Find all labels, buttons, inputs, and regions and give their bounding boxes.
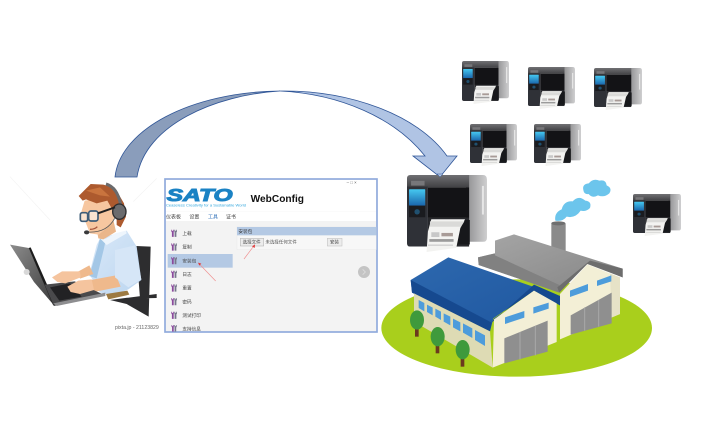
smile — [90, 227, 97, 229]
hair — [79, 184, 126, 227]
smoke clouds — [555, 180, 611, 221]
curved arrow from operator to printers — [115, 91, 457, 177]
window controls: – □ × — [347, 180, 357, 185]
sidebar menu — [171, 230, 201, 333]
back building wall — [560, 264, 620, 339]
SATO logo: SATO — [167, 185, 233, 205]
front door — [504, 321, 548, 363]
microphone — [87, 218, 115, 232]
sidebar menu: 支持信息 — [182, 326, 201, 333]
small printers — [462, 61, 681, 236]
sidebar menu: 复制 — [182, 244, 192, 251]
right forearm — [87, 275, 121, 293]
chimney — [551, 221, 566, 253]
green ground — [381, 279, 652, 377]
tie — [89, 238, 106, 278]
factory illustration — [381, 180, 652, 377]
torso — [89, 231, 141, 295]
side windows — [419, 300, 485, 346]
sidebar menu: 重置 — [182, 285, 192, 292]
top navigation: 仪表板 — [166, 214, 181, 221]
glasses — [80, 207, 115, 221]
back door — [571, 293, 612, 335]
blue roof — [411, 257, 560, 331]
selected sidebar item — [168, 254, 233, 268]
sidebar menu: 安装包 — [182, 257, 197, 264]
top navigation: 设置 — [189, 214, 199, 221]
laptop screen — [10, 245, 54, 305]
top navigation: 工具 — [208, 215, 218, 221]
belt — [106, 291, 129, 299]
chair — [110, 246, 157, 317]
roof lower tier — [478, 253, 559, 293]
front building side wall — [414, 293, 493, 368]
WebConfig window — [165, 179, 377, 333]
laptop base — [45, 281, 105, 306]
front gable windows — [505, 311, 524, 324]
roof gable edge — [557, 261, 623, 293]
headset ear cup — [113, 204, 126, 219]
content panel — [237, 227, 376, 250]
header band — [166, 180, 376, 211]
sidebar menu: 上载 — [182, 230, 192, 237]
hands — [52, 271, 81, 283]
illustration: technician with laptop — [10, 177, 157, 317]
watermark: PIXTA — [48, 246, 85, 257]
back windows — [570, 284, 588, 297]
back wall shade — [610, 273, 620, 317]
top navigation: 证书 — [226, 214, 236, 221]
next button — [358, 266, 370, 278]
sleeve — [115, 245, 141, 287]
microphone tip — [84, 230, 89, 234]
grey roof back — [478, 234, 623, 293]
left forearm — [77, 265, 93, 279]
WebConfig title: WebConfig — [251, 194, 304, 205]
sidebar menu: 密码 — [182, 298, 192, 305]
neck — [97, 220, 116, 239]
content panel: 安装 — [330, 239, 339, 246]
headset band — [106, 184, 121, 205]
laptop logo — [24, 269, 30, 275]
content panel: 安装包 — [238, 228, 253, 235]
arrow tip overlapping printer — [437, 174, 443, 177]
large printer — [407, 175, 487, 252]
pixta credit: pixta.jp - 21123829 — [115, 325, 159, 331]
red pointer arrows — [198, 244, 255, 281]
content panel: 未选择任何文件 — [265, 239, 297, 246]
sidebar menu: 日志 — [182, 271, 192, 278]
front building end wall — [493, 291, 557, 368]
content panel: 选择文件 — [243, 239, 261, 246]
SATO logo: Ceaseless Creativity for a Sustainable World — [166, 202, 246, 207]
collar — [100, 231, 127, 245]
faint diagonal marks — [10, 177, 157, 220]
top navigation — [166, 212, 376, 221]
sidebar menu: 测试打印 — [182, 312, 201, 319]
trees — [410, 310, 470, 367]
SATO logo — [166, 185, 246, 207]
face — [81, 197, 117, 235]
